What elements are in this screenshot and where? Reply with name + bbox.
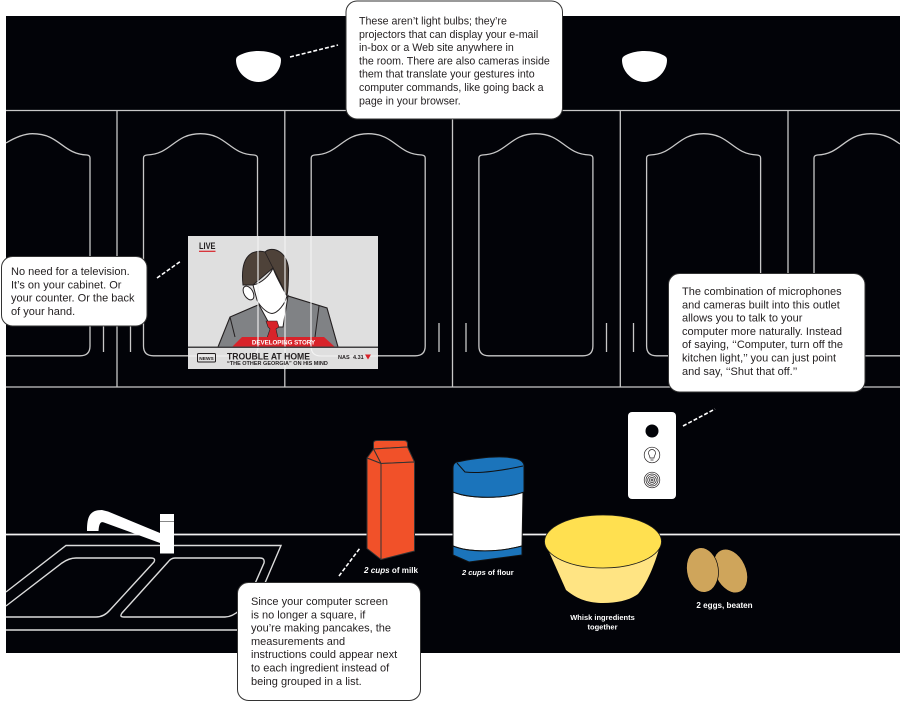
outlet xyxy=(628,412,676,499)
faucet xyxy=(87,510,174,554)
callout: projectors: computer commands, like going back a xyxy=(359,82,544,94)
callout: pancakes xyxy=(238,582,420,700)
bowl label: together xyxy=(588,622,618,632)
callout: pancakes: being grouped in a list. xyxy=(251,676,362,688)
callout: television: No need for a television. xyxy=(11,266,130,278)
callout: projectors: These aren’t light bulbs; they’re xyxy=(359,16,507,28)
subheadline: “THE OTHER GEORGIA” ON HIS MIND xyxy=(227,361,328,367)
eggs xyxy=(684,544,754,598)
mixing bowl xyxy=(544,515,662,603)
callout: pancakes: instructions could appear next xyxy=(251,649,397,661)
callout: outlet: computer more naturally. Instead xyxy=(682,326,842,338)
callout: outlet: allows you to talk to your xyxy=(682,313,803,325)
cabinets xyxy=(6,110,900,387)
callout: outlet: kitchen light,’’ you can just point xyxy=(682,352,836,364)
stock ticker: 4.31 xyxy=(353,355,364,361)
light icon xyxy=(644,447,660,463)
camera lens xyxy=(646,424,658,438)
callout: television: It’s on your cabinet. Or xyxy=(11,279,122,291)
callout: pancakes: to each ingredient instead of xyxy=(251,662,390,674)
callout: projectors xyxy=(346,1,562,119)
callout: projectors: page in your browser. xyxy=(359,95,461,107)
callout: projectors: projectors that can display your e-mail xyxy=(359,29,538,41)
callout: outlet: of saying, ‘‘Computer, turn off the xyxy=(682,339,843,351)
milk label: 2 cups of milk xyxy=(363,566,418,575)
news box xyxy=(198,354,216,362)
anchor ear xyxy=(241,284,256,302)
callout: outlet xyxy=(668,274,865,392)
callout: pancakes: you’re making pancakes, the xyxy=(251,623,391,635)
flour bag xyxy=(453,457,524,562)
ceiling light left xyxy=(236,51,281,82)
suit arm seams xyxy=(230,306,319,337)
dashed leader: television xyxy=(157,261,181,278)
anchor hair xyxy=(242,249,289,296)
down arrow xyxy=(365,354,371,360)
hair parting xyxy=(265,252,273,268)
callout: outlet: and cameras built into this outlet xyxy=(682,299,840,311)
stock ticker: NAS xyxy=(338,355,350,361)
callout: outlet: The combination of microphones xyxy=(682,286,842,298)
callout: pancakes: Since your computer screen xyxy=(251,596,388,608)
ceiling light right xyxy=(622,51,667,82)
callout: pancakes: is no longer a square, if xyxy=(251,609,366,621)
anchor shirt and tie xyxy=(258,296,288,338)
banner text: DEVELOPING STORY xyxy=(252,340,316,346)
callout: television: of your hand. xyxy=(11,306,75,318)
callout: television: your counter. Or the back xyxy=(11,293,135,305)
dashed leader: ingredients xyxy=(339,548,360,576)
live label: LIVE xyxy=(199,241,216,251)
callout: television xyxy=(2,256,147,326)
news box: NEWS xyxy=(199,356,214,362)
flour label: 2 cups of flour xyxy=(461,568,514,577)
callout: projectors: in-box or a Web site anywhere in xyxy=(359,42,514,54)
counter and sink lines xyxy=(6,534,900,630)
red banner xyxy=(232,337,335,347)
microphone icon xyxy=(644,472,660,488)
eggs label: 2 eggs, beaten xyxy=(696,601,753,610)
dashed leader: lights xyxy=(290,45,338,57)
dashed leader: outlet xyxy=(683,409,715,426)
callout: outlet: and say, ‘‘Shut that off.’’ xyxy=(682,366,797,378)
projected cabinet lines xyxy=(188,236,378,369)
headline: TROUBLE AT HOME xyxy=(227,352,310,362)
callout: projectors: them that translate your gestures into xyxy=(359,69,535,81)
anchor suit xyxy=(218,296,338,347)
projected news broadcast xyxy=(188,236,378,369)
ticker separator xyxy=(188,346,378,348)
anchor face xyxy=(253,268,287,314)
bowl label: Whisk ingredients xyxy=(570,613,635,622)
callout: pancakes: measurements and xyxy=(251,636,345,648)
milk carton xyxy=(367,440,414,560)
callout: projectors: the room. There are also cameras inside xyxy=(359,55,550,67)
